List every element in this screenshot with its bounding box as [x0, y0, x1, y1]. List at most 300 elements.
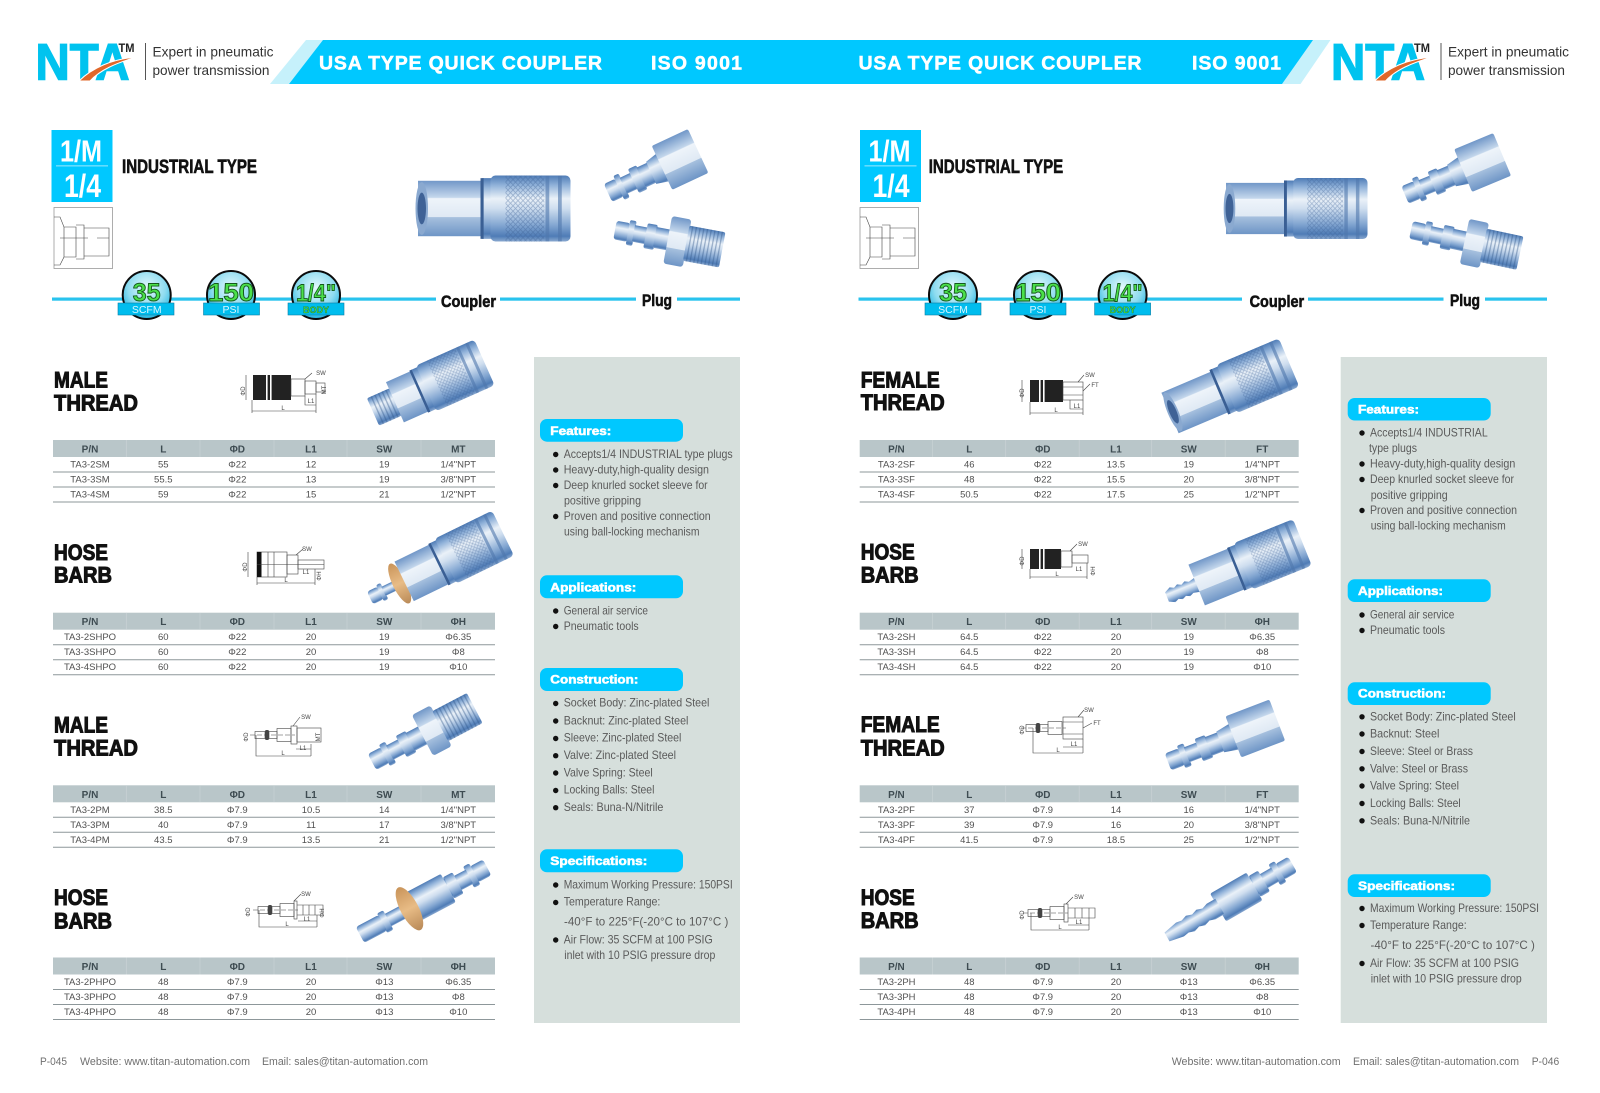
table: hose barb coupler, right: 20: [1111, 647, 1121, 658]
table: male thread coupler: 3/8"NPT: [441, 474, 476, 486]
left badge 35 SCFM: 35: [133, 279, 161, 307]
table: hose barb coupler, right: ΦH: [1255, 617, 1270, 628]
table: male thread coupler: P/N: [82, 444, 98, 456]
table: female thread plug: TA3-4PF: [878, 835, 915, 846]
table: female thread coupler: [860, 440, 1299, 502]
table: male thread plug: 40: [158, 820, 169, 831]
table: female thread plug: SW: [1181, 790, 1197, 801]
right heading: hose barb: HOSE: [861, 539, 915, 564]
right heading: hose barb plug: BARB: [861, 908, 919, 933]
drawing: hose barb plug: [246, 892, 326, 928]
table: hose barb plug, right: 20: [1111, 1007, 1121, 1018]
table: male thread coupler: 15: [306, 490, 316, 500]
table: hose barb coupler, right: L: [966, 617, 972, 628]
table: hose barb coupler, right: Φ8: [1256, 647, 1269, 658]
right header logo: NTA: [1331, 34, 1425, 90]
features heading, right: [1348, 398, 1491, 420]
right badge 150 PSI: [1010, 271, 1066, 319]
table: male thread plug: ΦD: [230, 790, 245, 801]
table: hose barb plug, right: TA3-4PH: [877, 1007, 916, 1018]
right badge 1/4 body: [1095, 271, 1151, 319]
panel: right specifications sidebar: [1341, 357, 1547, 1023]
table: female thread coupler: Φ22: [1034, 474, 1052, 486]
drawing: hose barb coupler: L: [284, 578, 288, 584]
table: hose barb plug, right: Φ13: [1180, 977, 1198, 988]
right heading: female thread: [861, 367, 945, 415]
table: hose barb plug, right: TA3-3PH: [877, 992, 916, 1003]
table: hose barb coupler, right: P/N: [888, 617, 905, 628]
right heading: hose barb: BARB: [861, 563, 919, 588]
right badge 35 SCFM: 35: [939, 279, 967, 307]
table: hose barb plug: SW: [376, 962, 393, 973]
drawing: male thread coupler: MT: [322, 385, 328, 394]
table: female thread coupler: TA3-3SF: [878, 474, 915, 486]
table: female thread coupler: 1/4"NPT: [1245, 459, 1280, 471]
table: male thread plug: L: [160, 790, 166, 801]
table: female thread coupler: Φ22: [1034, 489, 1052, 501]
table: male thread plug: SW: [376, 790, 393, 801]
specifications list: inlet with 10 PSIG pressure drop: [564, 948, 716, 962]
construction list, right: [1359, 709, 1516, 827]
left heading: hose barb plug: BARB: [54, 908, 112, 933]
table: hose barb coupler, right: 64.5: [960, 662, 978, 673]
table: male thread plug: 17: [379, 820, 390, 831]
table: hose barb coupler: L: [160, 617, 166, 628]
left footer: P-045: [40, 1056, 67, 1068]
table: hose barb plug: 20: [306, 1007, 316, 1018]
table: female thread coupler: 20: [1184, 474, 1194, 486]
left badge 150 PSI: PSI: [223, 304, 239, 316]
construction list, right: Valve Spring: Steel: [1370, 779, 1459, 793]
table: male thread plug: [53, 785, 495, 847]
table: female thread coupler: L1: [1110, 444, 1122, 456]
left size badge 1/M 1/4: 1/4: [64, 168, 101, 204]
left heading: hose barb plug: [54, 885, 112, 933]
construction list, right: Sleeve: Steel or Brass: [1370, 744, 1473, 758]
left footer: [40, 1056, 428, 1068]
drawing: female thread coupler: SW: [1085, 373, 1095, 379]
table: hose barb coupler, right: Φ6.35: [1249, 632, 1275, 643]
right footer: [1172, 1056, 1559, 1068]
applications heading, right: Applications:: [1358, 584, 1443, 598]
right header logo: Expert in pneumatic: [1448, 44, 1569, 60]
table: hose barb plug, right: L1: [1110, 962, 1122, 973]
drawing: male thread coupler: SW: [316, 371, 326, 377]
drawing: hose barb plug, right: SW: [1074, 895, 1084, 901]
table: female thread plug: 1/4"NPT: [1245, 805, 1280, 816]
table: hose barb coupler, right: ΦD: [1035, 617, 1050, 628]
features list: Proven and positive connection: [564, 509, 711, 523]
table: male thread plug: 10.5: [302, 805, 320, 816]
table: female thread plug: P/N: [888, 790, 905, 801]
table: hose barb plug, right: ΦD: [1035, 962, 1050, 973]
left badge 35 SCFM: SCFM: [132, 304, 162, 316]
right industrial type heading: INDUSTRIAL TYPE: [929, 157, 1063, 178]
table: hose barb coupler, right: [860, 613, 1299, 675]
table: male thread plug: Φ7.9: [227, 820, 248, 831]
table: hose barb coupler, right: 19: [1184, 662, 1194, 673]
features list, right: Proven and positive connection: [1370, 503, 1517, 517]
table: female thread plug: 1/2"NPT: [1245, 835, 1280, 846]
table: male thread plug: MT: [451, 790, 466, 801]
table: hose barb plug, right: 20: [1111, 977, 1121, 988]
left header logo: [36, 34, 274, 90]
table: male thread plug: TA3-2PM: [70, 805, 110, 816]
table: female thread plug: ΦD: [1035, 790, 1050, 801]
drawing: female thread plug: FT: [1093, 721, 1101, 727]
photo: right header female plug: [1396, 133, 1511, 216]
photo: right header male plug: [1406, 208, 1525, 276]
table: hose barb coupler: 20: [306, 632, 316, 643]
table: female thread plug: Φ7.9: [1032, 820, 1053, 831]
table: male thread coupler: 13: [306, 474, 316, 486]
table: female thread plug: 37: [964, 805, 974, 816]
applications list: General air service: [564, 604, 648, 618]
table: hose barb coupler: Φ22: [228, 632, 246, 643]
table: hose barb plug: L: [160, 962, 166, 973]
drawing: female thread plug: [1020, 708, 1101, 754]
table: hose barb plug: 20: [306, 977, 316, 988]
right heading: female thread plug: FEMALE: [861, 712, 940, 737]
right heading: hose barb: [861, 539, 919, 588]
left heading: male thread: THREAD: [54, 391, 138, 416]
table: female thread coupler: 13.5: [1107, 459, 1125, 471]
table: hose barb plug: TA3-4PHPO: [64, 1007, 116, 1018]
right heading: hose barb plug: HOSE: [861, 885, 915, 910]
drawing: hose barb plug, right: L1: [1076, 920, 1083, 926]
left heading: hose barb: [54, 540, 112, 588]
right heading: female thread: THREAD: [861, 390, 945, 415]
table: hose barb coupler: 20: [306, 662, 316, 673]
photo: male thread coupler: [363, 340, 495, 435]
table: female thread coupler: 1/2"NPT: [1245, 489, 1280, 501]
table: male thread coupler: 1/2"NPT: [441, 490, 476, 500]
table: male thread plug: Φ7.9: [227, 805, 248, 816]
drawing: female thread coupler: L1: [1074, 404, 1081, 410]
drawing: hose barb coupler, right: [1020, 542, 1097, 579]
table: female thread plug: L: [966, 790, 972, 801]
left heading: hose barb: HOSE: [54, 540, 108, 565]
drawing: female thread plug: SW: [1084, 708, 1094, 714]
right header logo: TM: [1414, 41, 1430, 55]
table: hose barb plug, right: P/N: [888, 962, 905, 973]
table: male thread plug: P/N: [82, 790, 98, 801]
left size badge 1/M 1/4: 1/M: [60, 134, 102, 168]
table: male thread coupler: 19: [379, 474, 390, 486]
specifications list, right: Maximum Working Pressure: 150PSI: [1370, 901, 1539, 915]
photo: left header male plug: [611, 206, 727, 274]
left header logo: Expert in pneumatic: [152, 44, 274, 60]
table: female thread plug: 3/8"NPT: [1245, 820, 1280, 831]
table: hose barb coupler, right: 64.5: [960, 647, 978, 658]
photo: female thread coupler: [1158, 338, 1299, 438]
applications heading, right: [1348, 579, 1491, 602]
table: hose barb plug, right: Φ8: [1256, 992, 1269, 1003]
features heading: Features:: [550, 424, 611, 438]
drawing: female thread coupler: FT: [1091, 383, 1099, 389]
applications heading: [540, 575, 683, 598]
left badge 1/4 body: 1/4": [296, 280, 336, 307]
table: female thread coupler: 46: [964, 459, 974, 471]
table: hose barb plug, right: 20: [1111, 992, 1121, 1003]
construction list: Valve: Zinc-plated Steel: [564, 748, 676, 762]
table: male thread coupler: ΦD: [230, 444, 245, 456]
photo: left header coupler: [416, 176, 570, 242]
photo: hose barb plug with washer: [349, 846, 498, 956]
table: hose barb coupler: 19: [379, 632, 390, 643]
table: hose barb plug, right: SW: [1181, 962, 1197, 973]
title band: [270, 40, 1330, 84]
table: female thread coupler: 50.5: [960, 489, 978, 501]
right plug label: Plug: [1450, 291, 1480, 310]
table: hose barb plug: 20: [306, 992, 316, 1003]
table: female thread coupler: Φ22: [1034, 459, 1052, 471]
table: male thread plug: TA3-3PM: [70, 820, 110, 831]
left heading: male thread: MALE: [54, 368, 108, 392]
table: female thread plug: TA3-3PF: [878, 820, 915, 831]
table: hose barb plug, right: Φ13: [1180, 1007, 1198, 1018]
table: hose barb plug: Φ7.9: [227, 992, 248, 1003]
table: female thread coupler: 15.5: [1107, 474, 1125, 486]
drawing: hose barb coupler: [243, 547, 324, 585]
drawing: female thread plug: L1: [1071, 742, 1078, 748]
table: hose barb coupler, right: Φ22: [1034, 632, 1052, 643]
left industrial type heading: INDUSTRIAL TYPE: [122, 157, 257, 178]
table: hose barb plug: L1: [305, 962, 317, 973]
table: hose barb coupler, right: Φ22: [1034, 647, 1052, 658]
table: hose barb coupler, right: TA3-3SH: [877, 647, 916, 658]
features list, right: positive gripping: [1371, 488, 1448, 502]
table: female thread coupler: TA3-4SF: [878, 489, 915, 501]
construction list, right: Socket Body: Zinc-plated Steel: [1370, 709, 1516, 723]
construction heading: [540, 668, 683, 691]
construction heading, right: [1348, 682, 1491, 705]
table: female thread coupler: ΦD: [1035, 444, 1050, 456]
specifications heading: [540, 849, 683, 872]
left coupler label: Coupler: [441, 292, 496, 311]
table: hose barb plug: TA3-2PHPO: [64, 977, 116, 988]
left size badge 1/M 1/4: [52, 130, 112, 204]
table: hose barb plug: Φ6.35: [445, 977, 471, 988]
table: female thread plug: 25: [1184, 835, 1194, 846]
table: hose barb plug: 48: [158, 1007, 169, 1018]
left heading: male thread: [54, 368, 138, 416]
table: male thread coupler: 19: [379, 460, 390, 470]
table: female thread coupler: FT: [1256, 444, 1268, 456]
drawing: female thread coupler: L: [1054, 408, 1058, 414]
drawing: male thread coupler: [241, 371, 328, 413]
drawing: hose barb plug: SW: [301, 892, 311, 898]
table: hose barb coupler: 20: [306, 647, 316, 658]
left heading: male thread plug: THREAD: [54, 736, 138, 761]
drawing: hose barb coupler, right: ΦH: [1091, 566, 1097, 576]
applications list, right: General air service: [1370, 608, 1455, 622]
right heading: female thread plug: [861, 712, 945, 760]
table: hose barb coupler: [53, 613, 495, 675]
drawing: male thread plug: MT: [316, 732, 322, 741]
table: female thread plug: 14: [1111, 805, 1121, 816]
table: hose barb plug: 48: [158, 992, 169, 1003]
table: hose barb coupler, right: SW: [1181, 617, 1197, 628]
table: male thread coupler: 59: [158, 490, 169, 500]
left header logo: power transmission: [152, 62, 270, 78]
table: hose barb coupler: TA3-3SHPO: [64, 647, 116, 658]
specifications list: Air Flow: 35 SCFM at 100 PSIG: [564, 932, 713, 946]
table: hose barb plug: Φ13: [375, 977, 393, 988]
drawing: hose barb coupler, right: L1: [1076, 567, 1083, 573]
construction list: Seals: Buna-N/Nitrile: [564, 800, 664, 814]
table: female thread plug: L1: [1110, 790, 1122, 801]
table: female thread coupler: 3/8"NPT: [1245, 474, 1280, 486]
construction list: Backnut: Zinc-plated Steel: [564, 713, 688, 727]
left plug profile diagram: [54, 208, 112, 268]
left heading: hose barb plug: HOSE: [54, 885, 108, 910]
construction list: Valve Spring: Steel: [564, 765, 653, 779]
table: female thread plug: TA3-2PF: [878, 805, 915, 816]
table: hose barb plug: Φ13: [375, 992, 393, 1003]
left heading: male thread plug: MALE: [54, 712, 108, 737]
right badge 35 SCFM: [925, 271, 981, 319]
construction list, right: Seals: Buna-N/Nitrile: [1370, 813, 1470, 827]
construction list: [553, 696, 709, 814]
table: male thread coupler: L: [160, 444, 166, 456]
drawing: hose barb plug: ΦD: [246, 907, 252, 917]
construction list, right: Backnut: Steel: [1370, 727, 1439, 741]
right spec divider line: [858, 298, 1547, 301]
table: hose barb coupler: TA3-4SHPO: [64, 662, 116, 673]
table: hose barb plug, right: TA3-2PH: [877, 977, 916, 988]
right header logo: power transmission: [1448, 62, 1565, 78]
table: female thread plug: FT: [1256, 790, 1268, 801]
left badge 150 PSI: 150: [208, 279, 254, 307]
table: hose barb coupler: Φ8: [452, 647, 465, 658]
photo: hose barb coupler with washer: [359, 511, 514, 620]
table: male thread plug: 38.5: [154, 805, 173, 816]
table: male thread coupler: TA3-3SM: [70, 474, 110, 486]
drawing: male thread plug: SW: [301, 715, 311, 721]
table: hose barb plug: ΦD: [230, 962, 245, 973]
table: hose barb coupler, right: 20: [1111, 662, 1121, 673]
table: hose barb coupler, right: L1: [1110, 617, 1122, 628]
table: female thread coupler: 19: [1184, 459, 1194, 471]
title band: ISO 9001: [651, 52, 742, 74]
drawing: hose barb plug: L1: [304, 917, 311, 923]
specifications list, right: [1359, 901, 1539, 986]
table: hose barb plug: 48: [158, 977, 169, 988]
drawing: female thread coupler: ΦD: [1020, 388, 1026, 398]
features list: Heavy-duty,high-quality design: [564, 462, 709, 476]
right badge 35 SCFM: SCFM: [938, 304, 968, 316]
construction heading: Construction:: [550, 672, 638, 686]
table: hose barb plug, right: 48: [964, 1007, 974, 1018]
specifications list, right: inlet with 10 PSIG pressure drop: [1371, 972, 1522, 986]
table: hose barb coupler, right: TA3-2SH: [877, 632, 916, 643]
drawing: hose barb coupler, right: ΦD: [1020, 556, 1026, 566]
table: hose barb coupler, right: 19: [1184, 632, 1194, 643]
table: hose barb coupler: P/N: [82, 617, 98, 628]
table: male thread plug: 1/2"NPT: [441, 835, 476, 846]
table: hose barb coupler: Φ22: [228, 647, 246, 658]
table: hose barb plug, right: [860, 958, 1299, 1020]
construction list, right: Locking Balls: Steel: [1370, 796, 1461, 810]
left badge 1/4 body: [288, 271, 344, 319]
table: male thread coupler: TA3-2SM: [70, 460, 110, 470]
construction list: Locking Balls: Steel: [564, 783, 654, 797]
specifications heading, right: Specifications:: [1358, 879, 1455, 893]
drawing: hose barb coupler, right: L: [1055, 572, 1059, 578]
specifications list, right: -40°F to 225°F(-20°C to 107°C ): [1370, 938, 1535, 952]
table: female thread coupler: SW: [1181, 444, 1197, 456]
specifications list: Temperature Range:: [564, 895, 660, 909]
table: male thread coupler: 55.5: [154, 474, 173, 486]
drawing: hose barb plug, right: [1020, 895, 1095, 931]
table: female thread plug: 39: [964, 820, 974, 831]
specifications list: -40°F to 225°F(-20°C to 107°C ): [564, 914, 728, 928]
applications list: Pneumatic tools: [564, 619, 639, 633]
drawing: female thread plug: ΦD: [1020, 725, 1026, 735]
table: hose barb coupler: 60: [158, 632, 169, 643]
construction list, right: Valve: Steel or Brass: [1370, 761, 1468, 775]
left header logo: TM: [118, 41, 135, 55]
table: female thread plug: 18.5: [1107, 835, 1125, 846]
right heading: female thread: FEMALE: [861, 367, 940, 392]
applications list, right: Pneumatic tools: [1370, 623, 1445, 637]
features heading: [540, 419, 683, 442]
table: hose barb plug: P/N: [82, 962, 98, 973]
table: hose barb plug, right: Φ7.9: [1032, 992, 1053, 1003]
table: hose barb coupler, right: Φ10: [1253, 662, 1271, 673]
right plug profile diagram: [860, 208, 918, 268]
drawing: male thread plug: [244, 715, 322, 757]
table: hose barb coupler: Φ6.35: [445, 632, 471, 643]
features list: [553, 447, 733, 539]
table: male thread plug: 13.5: [302, 835, 320, 846]
specifications list: [553, 877, 733, 962]
left heading: male thread plug: [54, 712, 138, 761]
right footer: P-046: [1532, 1056, 1559, 1068]
title band: USA TYPE QUICK COUPLER: [858, 52, 1142, 74]
applications heading: Applications:: [550, 581, 636, 595]
drawing: hose barb plug: ΦH: [320, 908, 326, 918]
applications list, right: [1359, 608, 1455, 637]
drawing: male thread plug: L1: [300, 746, 307, 752]
title band: ISO 9001: [1192, 52, 1281, 74]
left badge 35 SCFM: [118, 271, 174, 319]
photo: hose barb coupler, right: [1158, 519, 1312, 620]
table: female thread coupler: P/N: [888, 444, 905, 456]
table: hose barb coupler, right: 20: [1111, 632, 1121, 643]
table: male thread coupler: 21: [379, 490, 390, 500]
table: male thread plug: 21: [379, 835, 390, 846]
table: hose barb coupler: 60: [158, 647, 169, 658]
table: hose barb plug: Φ13: [375, 1007, 393, 1018]
table: hose barb plug: Φ10: [449, 1007, 467, 1018]
table: hose barb coupler: TA3-2SHPO: [64, 632, 116, 643]
right size badge 1/M 1/4: [860, 130, 921, 204]
features list, right: using ball-locking mechanism: [1371, 519, 1506, 533]
right badge 150 PSI: PSI: [1030, 304, 1046, 316]
drawing: hose barb plug: L: [285, 922, 289, 928]
photo: hose barb plug, right: [1159, 851, 1301, 951]
applications list: [553, 604, 648, 633]
table: female thread plug: Φ7.9: [1032, 835, 1053, 846]
right badge 150 PSI: 150: [1015, 279, 1061, 307]
drawing: female thread plug: L: [1056, 748, 1060, 754]
construction list: Sleeve: Zinc-plated Steel: [564, 731, 681, 745]
table: male thread plug: Φ7.9: [227, 835, 248, 846]
table: male thread plug: 11: [306, 820, 316, 831]
table: male thread plug: L1: [305, 790, 317, 801]
